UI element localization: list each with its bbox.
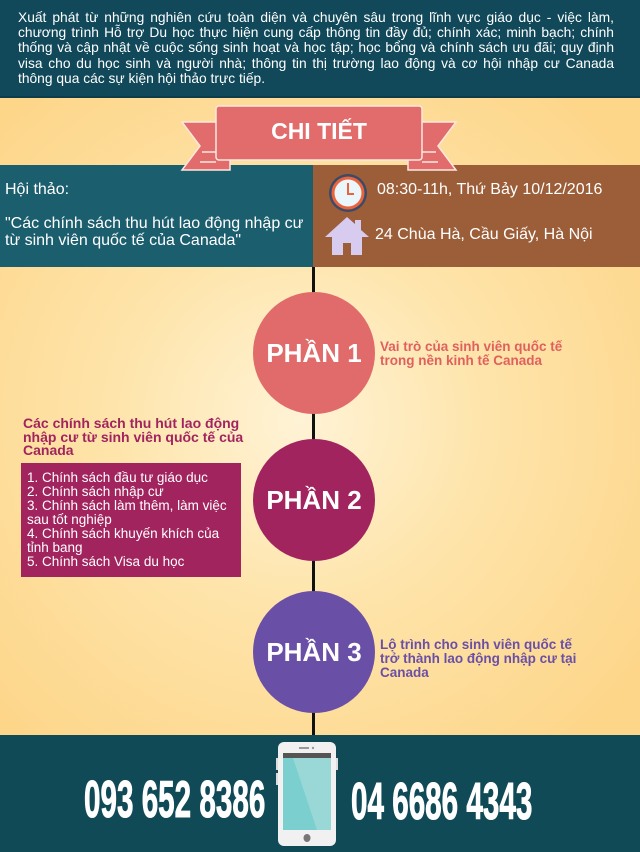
ribbon: CHI TIẾT: CHI TIẾT: [271, 118, 367, 144]
text: part 3: Canada: [380, 665, 429, 680]
list box: part 2: [21, 463, 241, 577]
intro text: Xuất phát từ những nghiên cứu toàn diện và chuyên sâu trong lĩnh vực giáo dục - việc làm, chương trình Hỗ trợ Du học thực hiện cung cấp thông tin đầy đủ; chính xác; minh bạch; chính thống và cập nhật về cuộc sống sinh hoạt và học tập; học bổng và chính sách ưu đãi; quy định visa cho du học sinh và người nhà; thông tin thị trường lao động và cơ hội nhập cư Canada thông qua các sự kiện hội thảo trực tiếp.: [18, 10, 614, 86]
panel: time and place: [313, 165, 640, 267]
text: part 3: trở thành lao động nhập cư tại: [380, 651, 576, 666]
circle: PHẦN 2: [253, 439, 375, 561]
circle: PHẦN 1: PHẦN 1: [266, 338, 362, 368]
timeline line: [312, 260, 315, 740]
icon: phone: [276, 742, 338, 846]
panel: seminar: [0, 165, 313, 267]
list box: part 2: 3. Chính sách làm thêm, làm việc sau tốt nghiệp: [27, 498, 227, 527]
icon: clock: [329, 174, 367, 212]
panel: time and place: 08:30-11h, Thứ Bảy 10/12/2016: [377, 181, 602, 198]
panel: seminar: Hội thảo:: [5, 181, 69, 198]
text: part 3: [380, 637, 576, 680]
phone number 2: 04 6686 4343: [351, 773, 532, 831]
list box: part 2: 1. Chính sách đầu tư giáo dục: [27, 470, 208, 485]
list box: part 2: 2. Chính sách nhập cư: [27, 484, 164, 499]
header intro: [0, 0, 640, 98]
circle: PHẦN 2: PHẦN 2: [266, 484, 362, 514]
panel: seminar: "Các chính sách thu hút lao động nhập cư từ sinh viên quốc tế của Canada": [5, 215, 303, 249]
ribbon: CHI TIẾT: [180, 105, 458, 171]
footer: [0, 735, 640, 852]
phone number 1: 093 652 8386: [84, 771, 265, 829]
text: part 1: trong nền kinh tế Canada: [380, 353, 542, 368]
text: part 1: [380, 339, 562, 368]
list box: part 2: 5. Chính sách Visa du học: [27, 554, 184, 569]
list box: part 2: 4. Chính sách khuyến khích của tỉnh bang: [27, 526, 219, 555]
circle: PHẦN 1: [253, 292, 375, 414]
heading: part 2: Các chính sách thu hút lao động nhập cư từ sinh viên quốc tế của Canada: [23, 415, 243, 458]
circle: PHẦN 3: PHẦN 3: [266, 636, 362, 666]
circle: PHẦN 3: [253, 591, 375, 713]
icon: house: [325, 217, 369, 255]
panel: time and place: 24 Chùa Hà, Cầu Giấy, Hà Nội: [375, 226, 593, 243]
text: part 1: Vai trò của sinh viên quốc tế: [380, 339, 562, 354]
text: part 3: Lộ trình cho sinh viên quốc tế: [380, 637, 572, 652]
